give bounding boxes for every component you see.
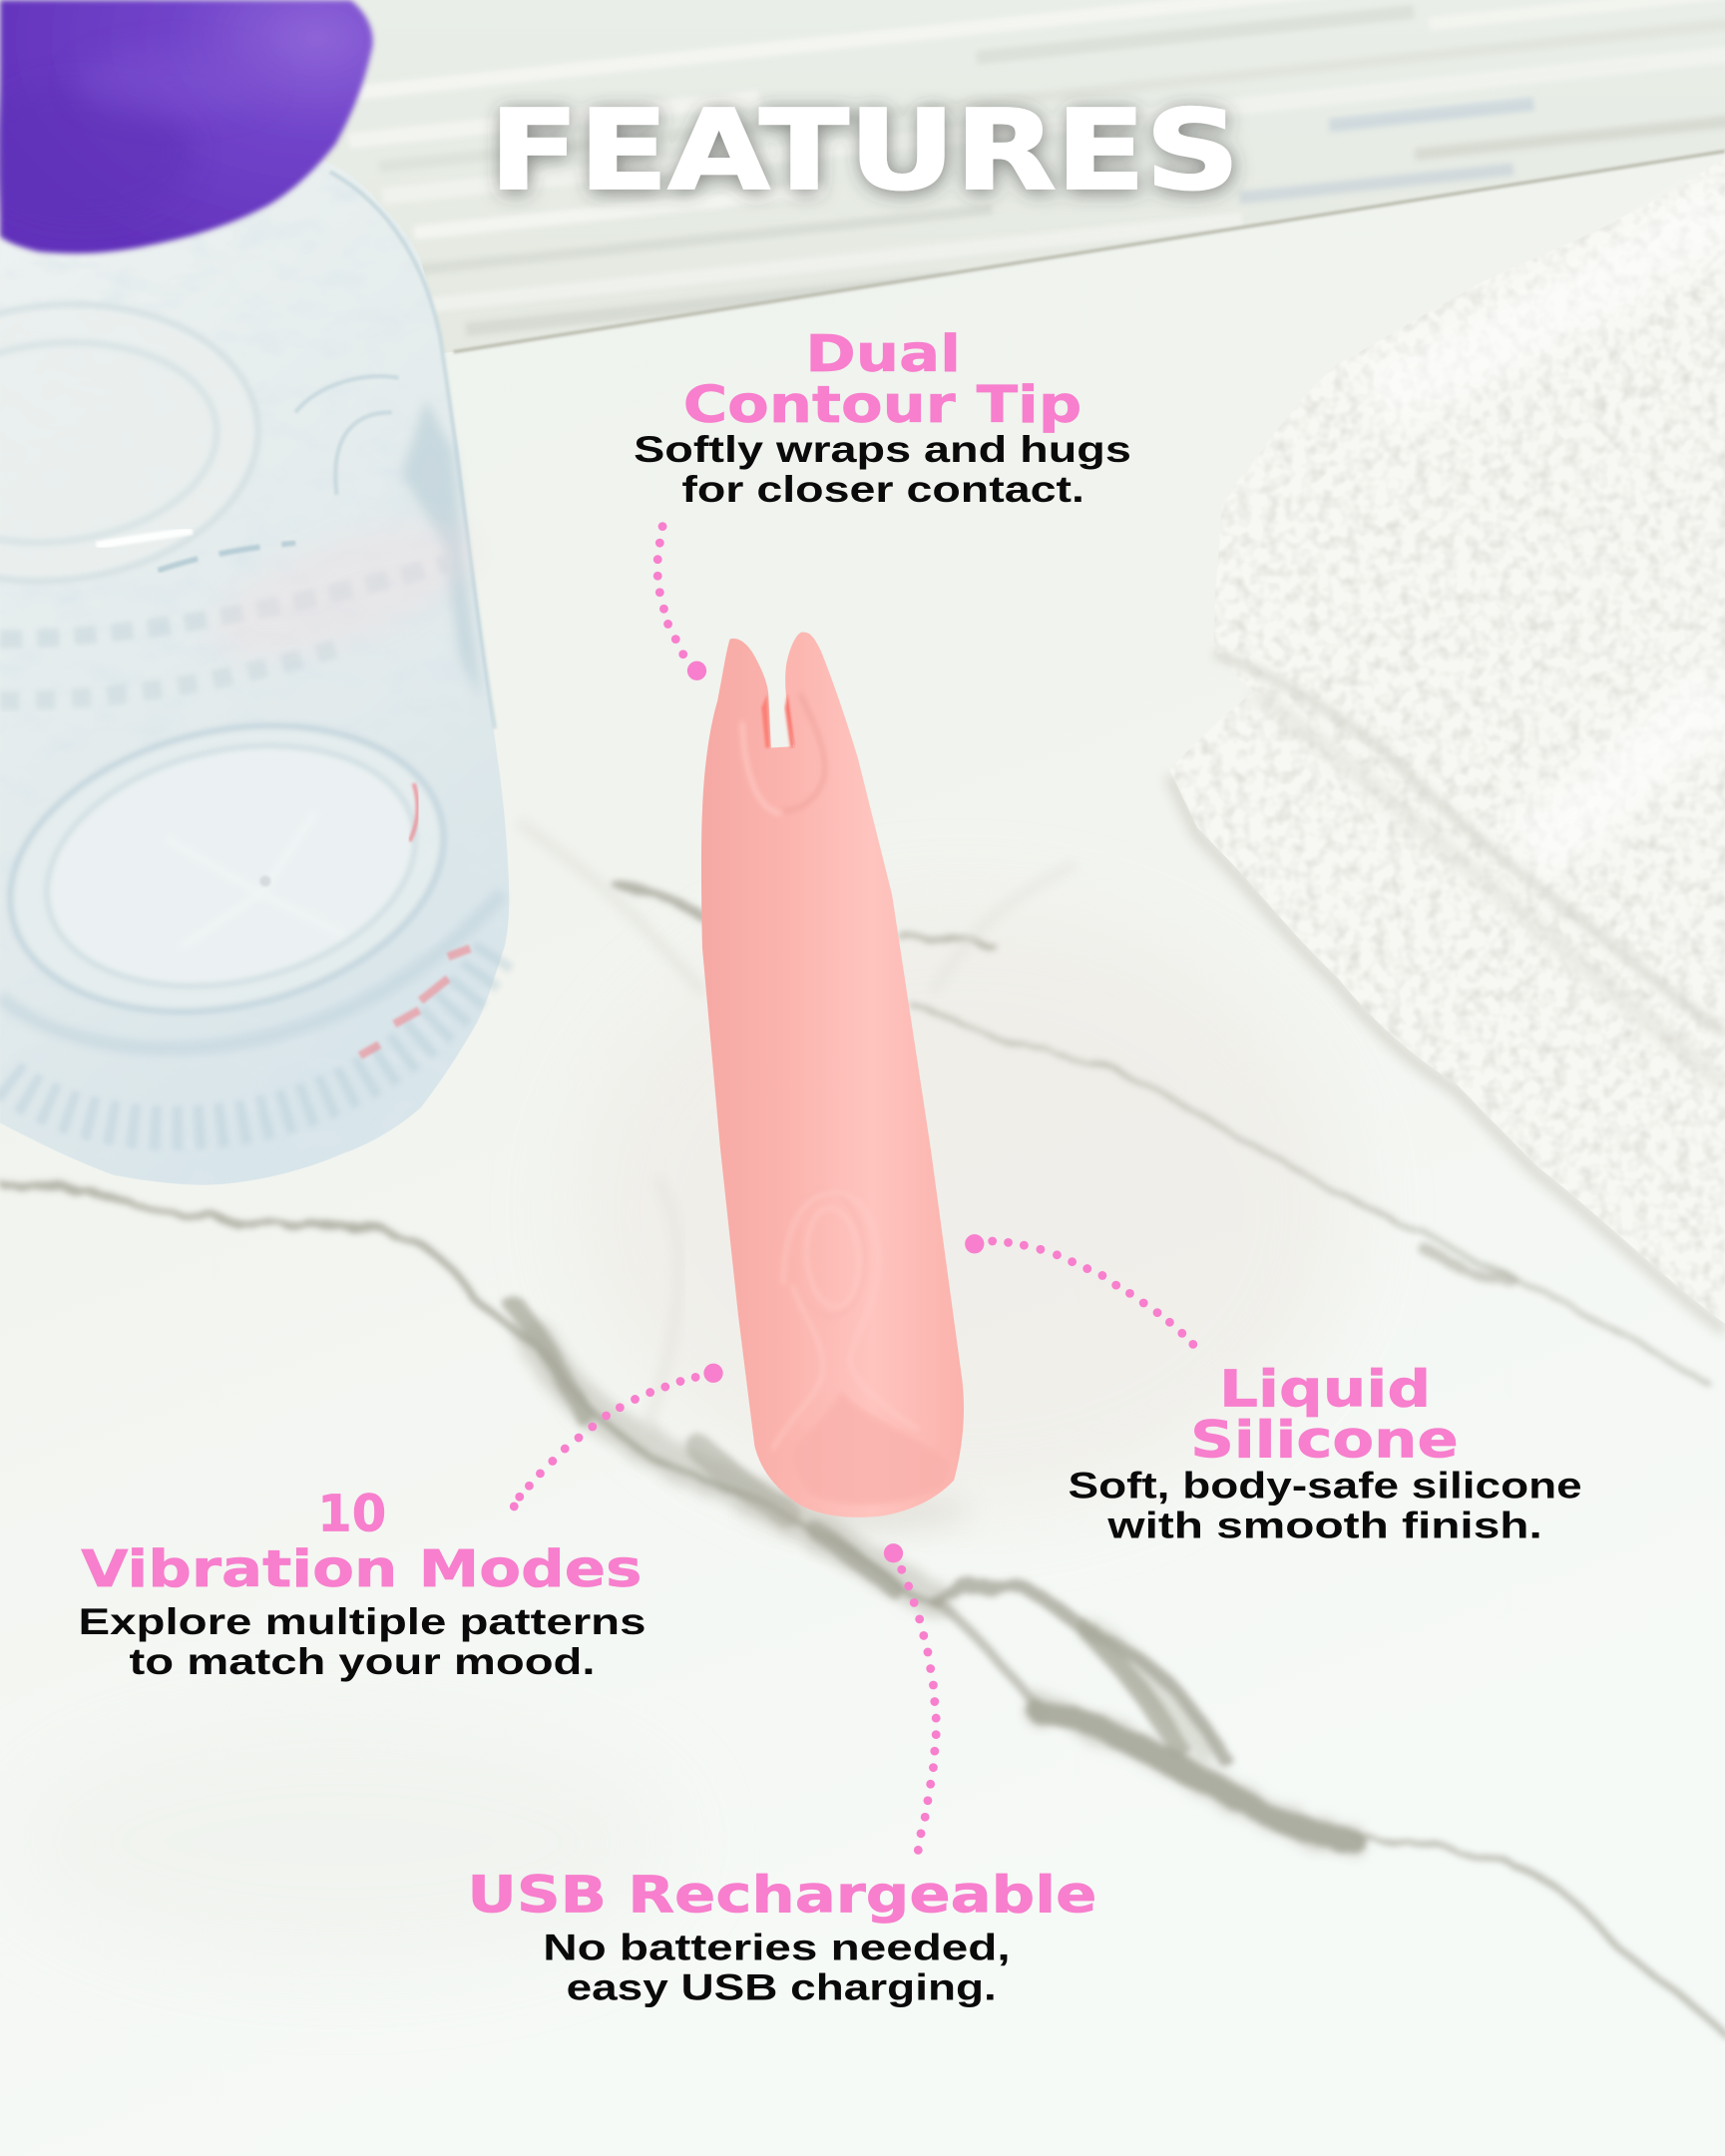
callout: 10 Vibration Modes — [79, 1364, 723, 1682]
heading: Liquid — [1219, 1360, 1431, 1419]
pink reflections — [410, 783, 418, 841]
contour swirl — [772, 1187, 918, 1450]
end cap — [793, 1391, 950, 1505]
upper oval motif — [0, 284, 271, 601]
description: No batteries needed, — [543, 1927, 1011, 1968]
purple pump top — [0, 0, 373, 253]
description — [1068, 1465, 1582, 1546]
heading: 10 — [317, 1486, 386, 1544]
description: Softly wraps and hugs — [634, 428, 1131, 470]
description: Soft, body-safe silicone — [1068, 1465, 1582, 1507]
heading — [683, 325, 1081, 435]
product: pink device — [701, 632, 969, 1531]
description: for closer contact. — [681, 468, 1084, 510]
callout: Dual Contour Tip — [634, 325, 1131, 680]
callout: USB Rechargeable — [467, 1543, 1096, 2007]
background wall tiles — [325, 2, 1725, 355]
marble island outline — [936, 1586, 1223, 1758]
towel stack — [1169, 158, 1725, 1331]
description: to match your mood. — [130, 1640, 596, 1682]
title: FEATURES — [489, 87, 1240, 215]
heading: Dual — [805, 325, 961, 384]
base ribs — [0, 893, 502, 1049]
heading: Silicone — [1190, 1411, 1459, 1470]
dotted arrow — [884, 1543, 941, 1855]
lower oval motif — [0, 685, 472, 1053]
callout: Liquid Silicone — [965, 1234, 1582, 1546]
heading: USB Rechargeable — [467, 1866, 1096, 1925]
dotted arrow — [510, 1364, 723, 1510]
dotted arrow — [653, 522, 706, 680]
description — [79, 1600, 647, 1682]
heading: Contour Tip — [683, 376, 1081, 435]
heading — [1190, 1360, 1459, 1470]
heading: Vibration Modes — [81, 1540, 642, 1599]
blue facets on right shoulder — [401, 399, 481, 701]
description: Explore multiple patterns — [79, 1600, 647, 1642]
main veins — [0, 887, 1725, 2034]
marble veins — [0, 825, 1725, 2034]
heading — [81, 1486, 642, 1599]
description — [543, 1927, 1011, 2007]
device body — [701, 632, 964, 1517]
description: with smooth finish. — [1106, 1505, 1542, 1546]
description — [634, 428, 1131, 510]
dual tip notch — [742, 694, 825, 814]
dimple rows — [158, 543, 295, 571]
glass bottle — [0, 161, 509, 1185]
wide diffuse halo — [536, 1340, 1354, 1842]
dotted arrow — [965, 1234, 1197, 1349]
description: easy USB charging. — [567, 1965, 997, 2007]
